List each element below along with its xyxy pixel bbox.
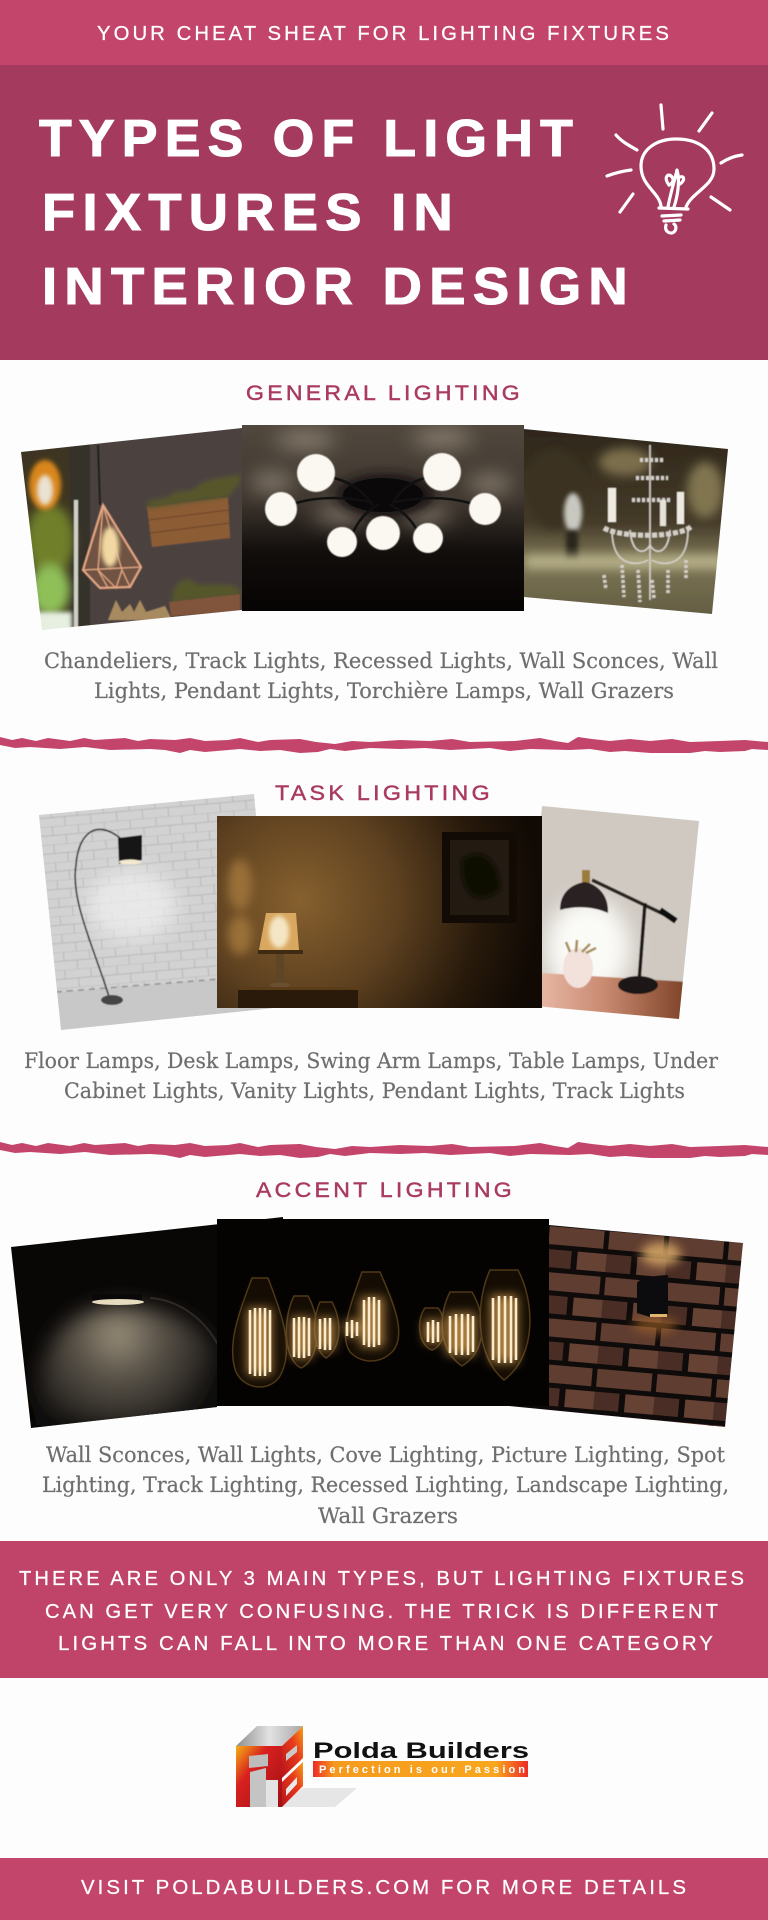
photo: edison filament bulbs — [217, 1219, 549, 1406]
text: general lighting fixtures: Lights, Pendant Lights, Torchière Lamps, Wall Grazers — [94, 679, 674, 703]
logo: Polda Builders: Polda Builders — [313, 1738, 529, 1763]
title — [39, 110, 635, 316]
logo: Polda Builders: Perfection is our Passion — [319, 1764, 525, 1776]
photo: table lamp with black shade — [541, 806, 699, 1019]
filament glow — [247, 1295, 518, 1375]
text: accent lighting fixtures: Wall Sconces, Wall Lights, Cove Lighting, Picture Lighting, Spot — [46, 1443, 726, 1467]
callout band: LIGHTS CAN FALL INTO MORE THAN ONE CATEGORY — [58, 1633, 716, 1655]
text: general lighting fixtures — [44, 649, 718, 703]
photo: table lamp in dark room — [217, 816, 542, 1008]
photo: sconce on brick wall — [505, 1220, 750, 1432]
photo: copper pendant lamp — [15, 420, 245, 635]
heading: accent lighting: ACCENT LIGHTING — [256, 1179, 515, 1202]
top banner: YOUR CHEAT SHEAT FOR LIGHTING FIXTURES — [97, 23, 672, 45]
text: accent lighting fixtures: Wall Grazers — [318, 1504, 458, 1528]
heading: task lighting: TASK LIGHTING — [275, 782, 493, 805]
text: task lighting fixtures: Cabinet Lights, Vanity Lights, Pendant Lights, Track Lights — [64, 1079, 685, 1103]
callout band — [0, 1541, 768, 1678]
photo: wall light in dark room — [11, 1217, 283, 1428]
photo: arc floor lamp on white brick — [39, 794, 273, 1030]
text: accent lighting fixtures: Lighting, Track Lighting, Recessed Lighting, Landscape Lighting, — [42, 1473, 729, 1497]
logo: Polda Builders — [236, 1726, 529, 1807]
title panel — [0, 65, 768, 360]
photo: ceiling light with globes — [242, 425, 524, 611]
title: FIXTURES IN — [42, 184, 460, 242]
footer band — [0, 1858, 768, 1920]
icon: light bulb — [607, 105, 742, 233]
callout band: CAN GET VERY CONFUSING. THE TRICK IS DIFFERENT — [45, 1601, 721, 1623]
text: task lighting fixtures — [24, 1049, 719, 1103]
text: accent lighting fixtures — [42, 1443, 729, 1528]
callout band: THERE ARE ONLY 3 MAIN TYPES, BUT LIGHTING FIXTURES — [19, 1568, 747, 1590]
top banner — [0, 0, 768, 65]
text: task lighting fixtures: Floor Lamps, Desk Lamps, Swing Arm Lamps, Table Lamps, Under — [24, 1049, 719, 1073]
footer band: VISIT POLDABUILDERS.COM FOR MORE DETAILS — [81, 1877, 689, 1899]
title: INTERIOR DESIGN — [42, 258, 635, 316]
bulb outlines — [233, 1270, 530, 1387]
photo: chandelier on sepia background — [520, 425, 735, 620]
text: general lighting fixtures: Chandeliers, Track Lights, Recessed Lights, Wall Sconces, Wall — [44, 649, 718, 673]
filaments — [250, 1296, 516, 1376]
title: TYPES OF LIGHT — [39, 110, 580, 168]
heading: general lighting: GENERAL LIGHTING — [246, 382, 523, 405]
